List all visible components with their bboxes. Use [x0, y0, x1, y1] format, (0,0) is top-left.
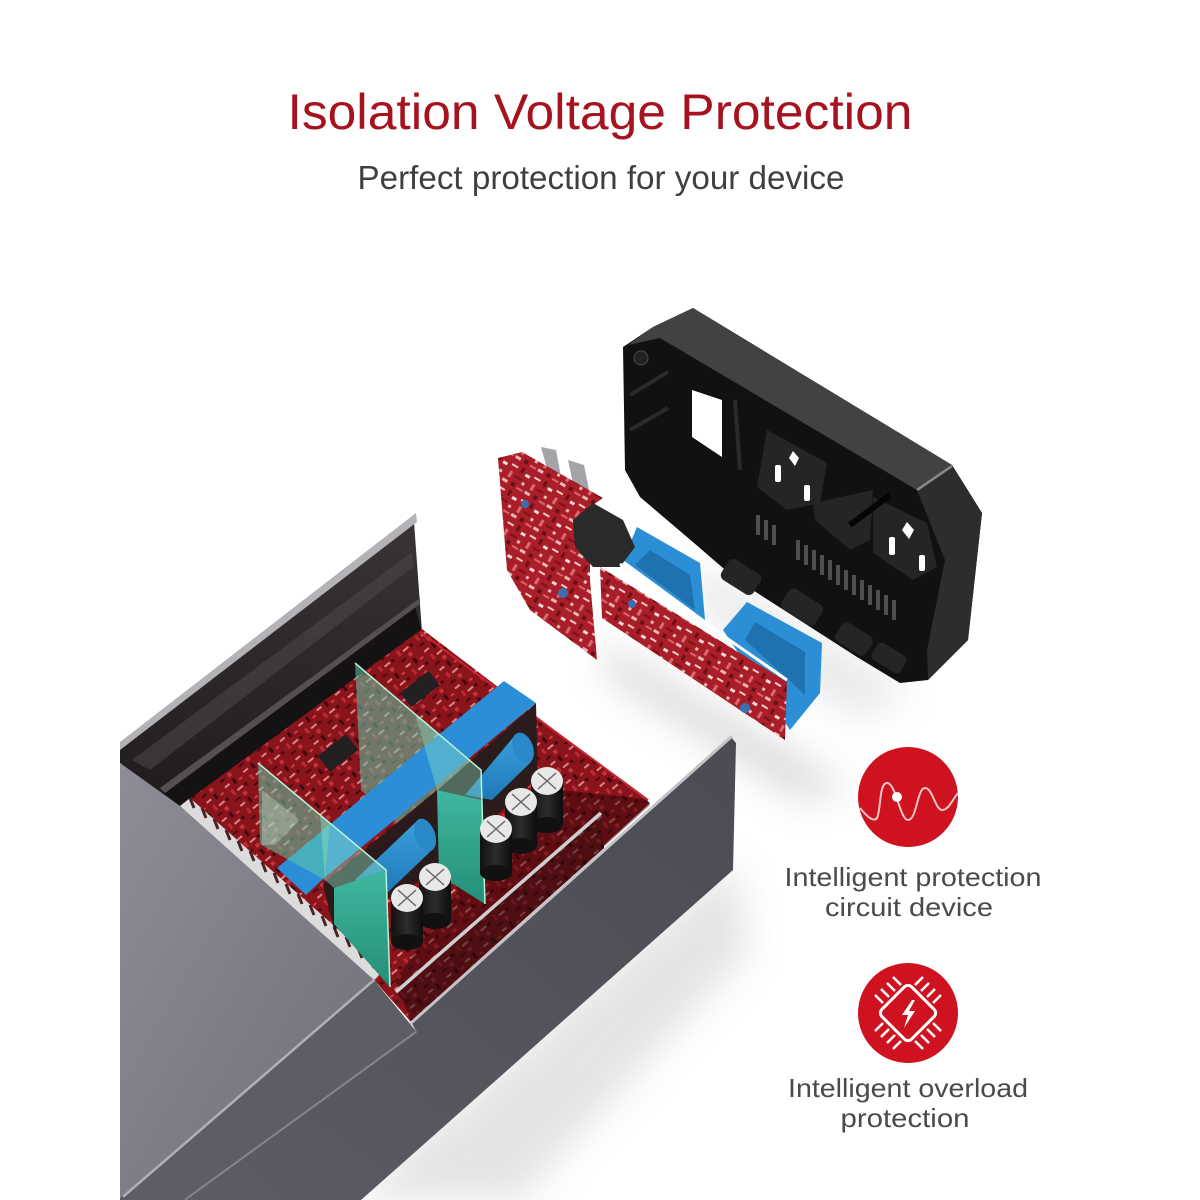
end cap housing: [623, 308, 982, 683]
top rim: [628, 308, 952, 490]
rear circuit board: [498, 447, 603, 660]
label: intelligent protection circuit device: circuit device: [825, 892, 993, 922]
blue band: [277, 681, 536, 895]
label: intelligent protection circuit device: [784, 862, 1042, 922]
side face: [184, 737, 736, 1200]
black core front: [323, 790, 437, 930]
screw post: [634, 351, 648, 365]
label: intelligent overload protection: Intelligent overload: [788, 1073, 1028, 1103]
left wall ribs: [630, 372, 740, 470]
icon: intelligent overload protection chip: [858, 963, 958, 1063]
main power strip housing: [120, 513, 736, 1200]
front rail and lower board strip: [396, 813, 604, 1016]
label: intelligent overload protection: [788, 1073, 1028, 1133]
side window: [692, 390, 722, 457]
subtitle: Perfect protection for your device: [358, 159, 844, 196]
transformer assembly: [277, 681, 538, 930]
circuit board inside housing: [180, 629, 650, 1022]
black connector: [573, 503, 635, 567]
middle bevel band: [120, 980, 416, 1200]
front circuit board: [600, 564, 787, 740]
inner recessed panels: [719, 430, 937, 675]
blue bobbin rear: [623, 527, 705, 620]
rear isolation plate front layer: [355, 663, 485, 904]
blue bobbin front: [723, 602, 822, 730]
icon: intelligent protection circuit: [858, 747, 958, 847]
highlight edges: [124, 737, 731, 1199]
label: intelligent overload protection: protection: [840, 1103, 970, 1133]
top face: [120, 763, 374, 1198]
plug prongs: [541, 447, 590, 495]
blue coil rear: [465, 730, 538, 800]
capacitors: [391, 767, 563, 950]
blue coil front: [355, 816, 440, 895]
back wall heat sink: [120, 513, 422, 810]
rear isolation plate back layer: [355, 663, 485, 904]
ribs row: [758, 515, 894, 620]
teeth along top cover edge: [180, 798, 384, 980]
slit between sockets: [850, 495, 890, 525]
front isolation plate: [258, 763, 390, 987]
socket holes: [775, 451, 925, 571]
chamfered right end: [917, 465, 982, 680]
title: Isolation Voltage Protection: [288, 84, 912, 140]
outer body: [623, 308, 982, 683]
black core rear: [432, 703, 538, 871]
label: intelligent protection circuit device: Intelligent protection: [784, 862, 1042, 892]
drop shadows: [350, 560, 910, 1200]
